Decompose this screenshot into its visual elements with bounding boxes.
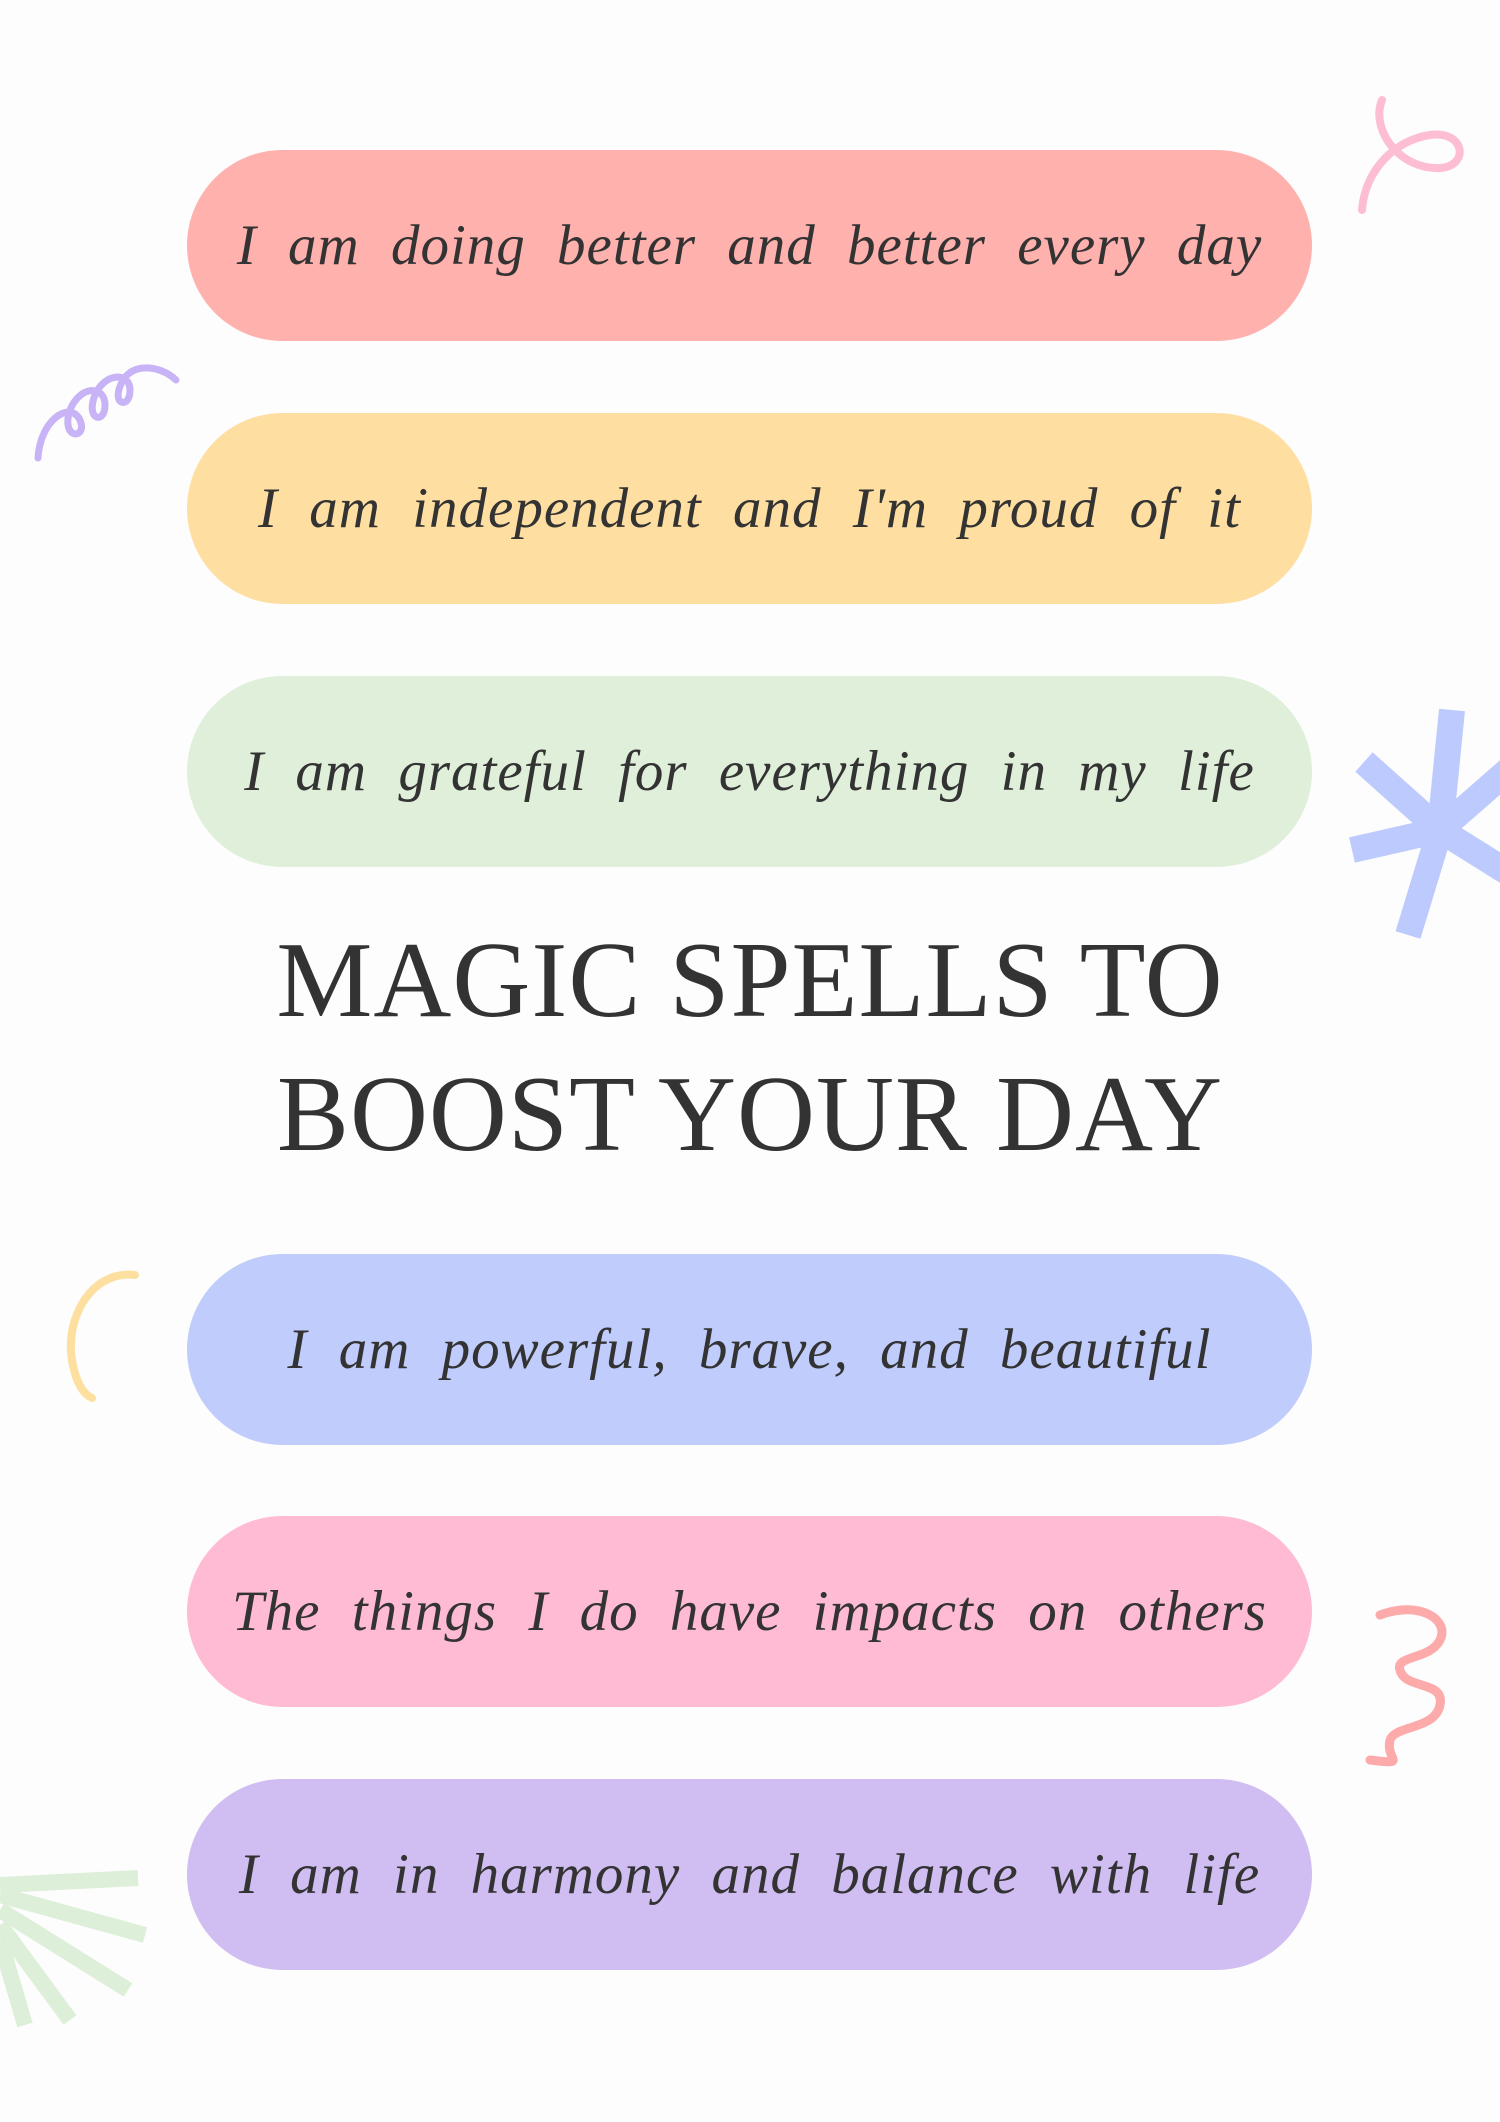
icon: purple coil left: [38, 368, 176, 458]
pill: affirmation 4: [187, 1254, 1312, 1445]
title: MAGIC SPELLS TO: [276, 921, 1224, 1040]
title: BOOST YOUR DAY: [277, 1055, 1223, 1174]
pill: affirmation 3: [187, 676, 1312, 867]
pill: affirmation 3: I am grateful for everything in my life: [244, 740, 1255, 803]
title: [276, 921, 1224, 1174]
icon: pink loop top right: [1362, 100, 1460, 210]
pill: affirmation 1: [187, 150, 1312, 341]
icon: yellow arc left: [71, 1275, 135, 1398]
pill: affirmation 6: I am in harmony and balance with life: [239, 1843, 1260, 1906]
icon: blue asterisk right: [1352, 710, 1500, 935]
icon: salmon squiggle right: [1370, 1610, 1442, 1762]
pill: affirmation 1: I am doing better and better every day: [237, 214, 1262, 277]
pill: affirmation 2: I am independent and I'm proud of it: [258, 477, 1241, 540]
pill: affirmation 2: [187, 413, 1312, 604]
pill: affirmation 6: [187, 1779, 1312, 1970]
pill: affirmation 5: [187, 1516, 1312, 1707]
icon: green rays bottom left: [0, 1878, 145, 2025]
pill: affirmation 5: The things I do have impacts on others: [232, 1580, 1267, 1643]
pill: affirmation 4: I am powerful, brave, and beautiful: [288, 1318, 1212, 1381]
